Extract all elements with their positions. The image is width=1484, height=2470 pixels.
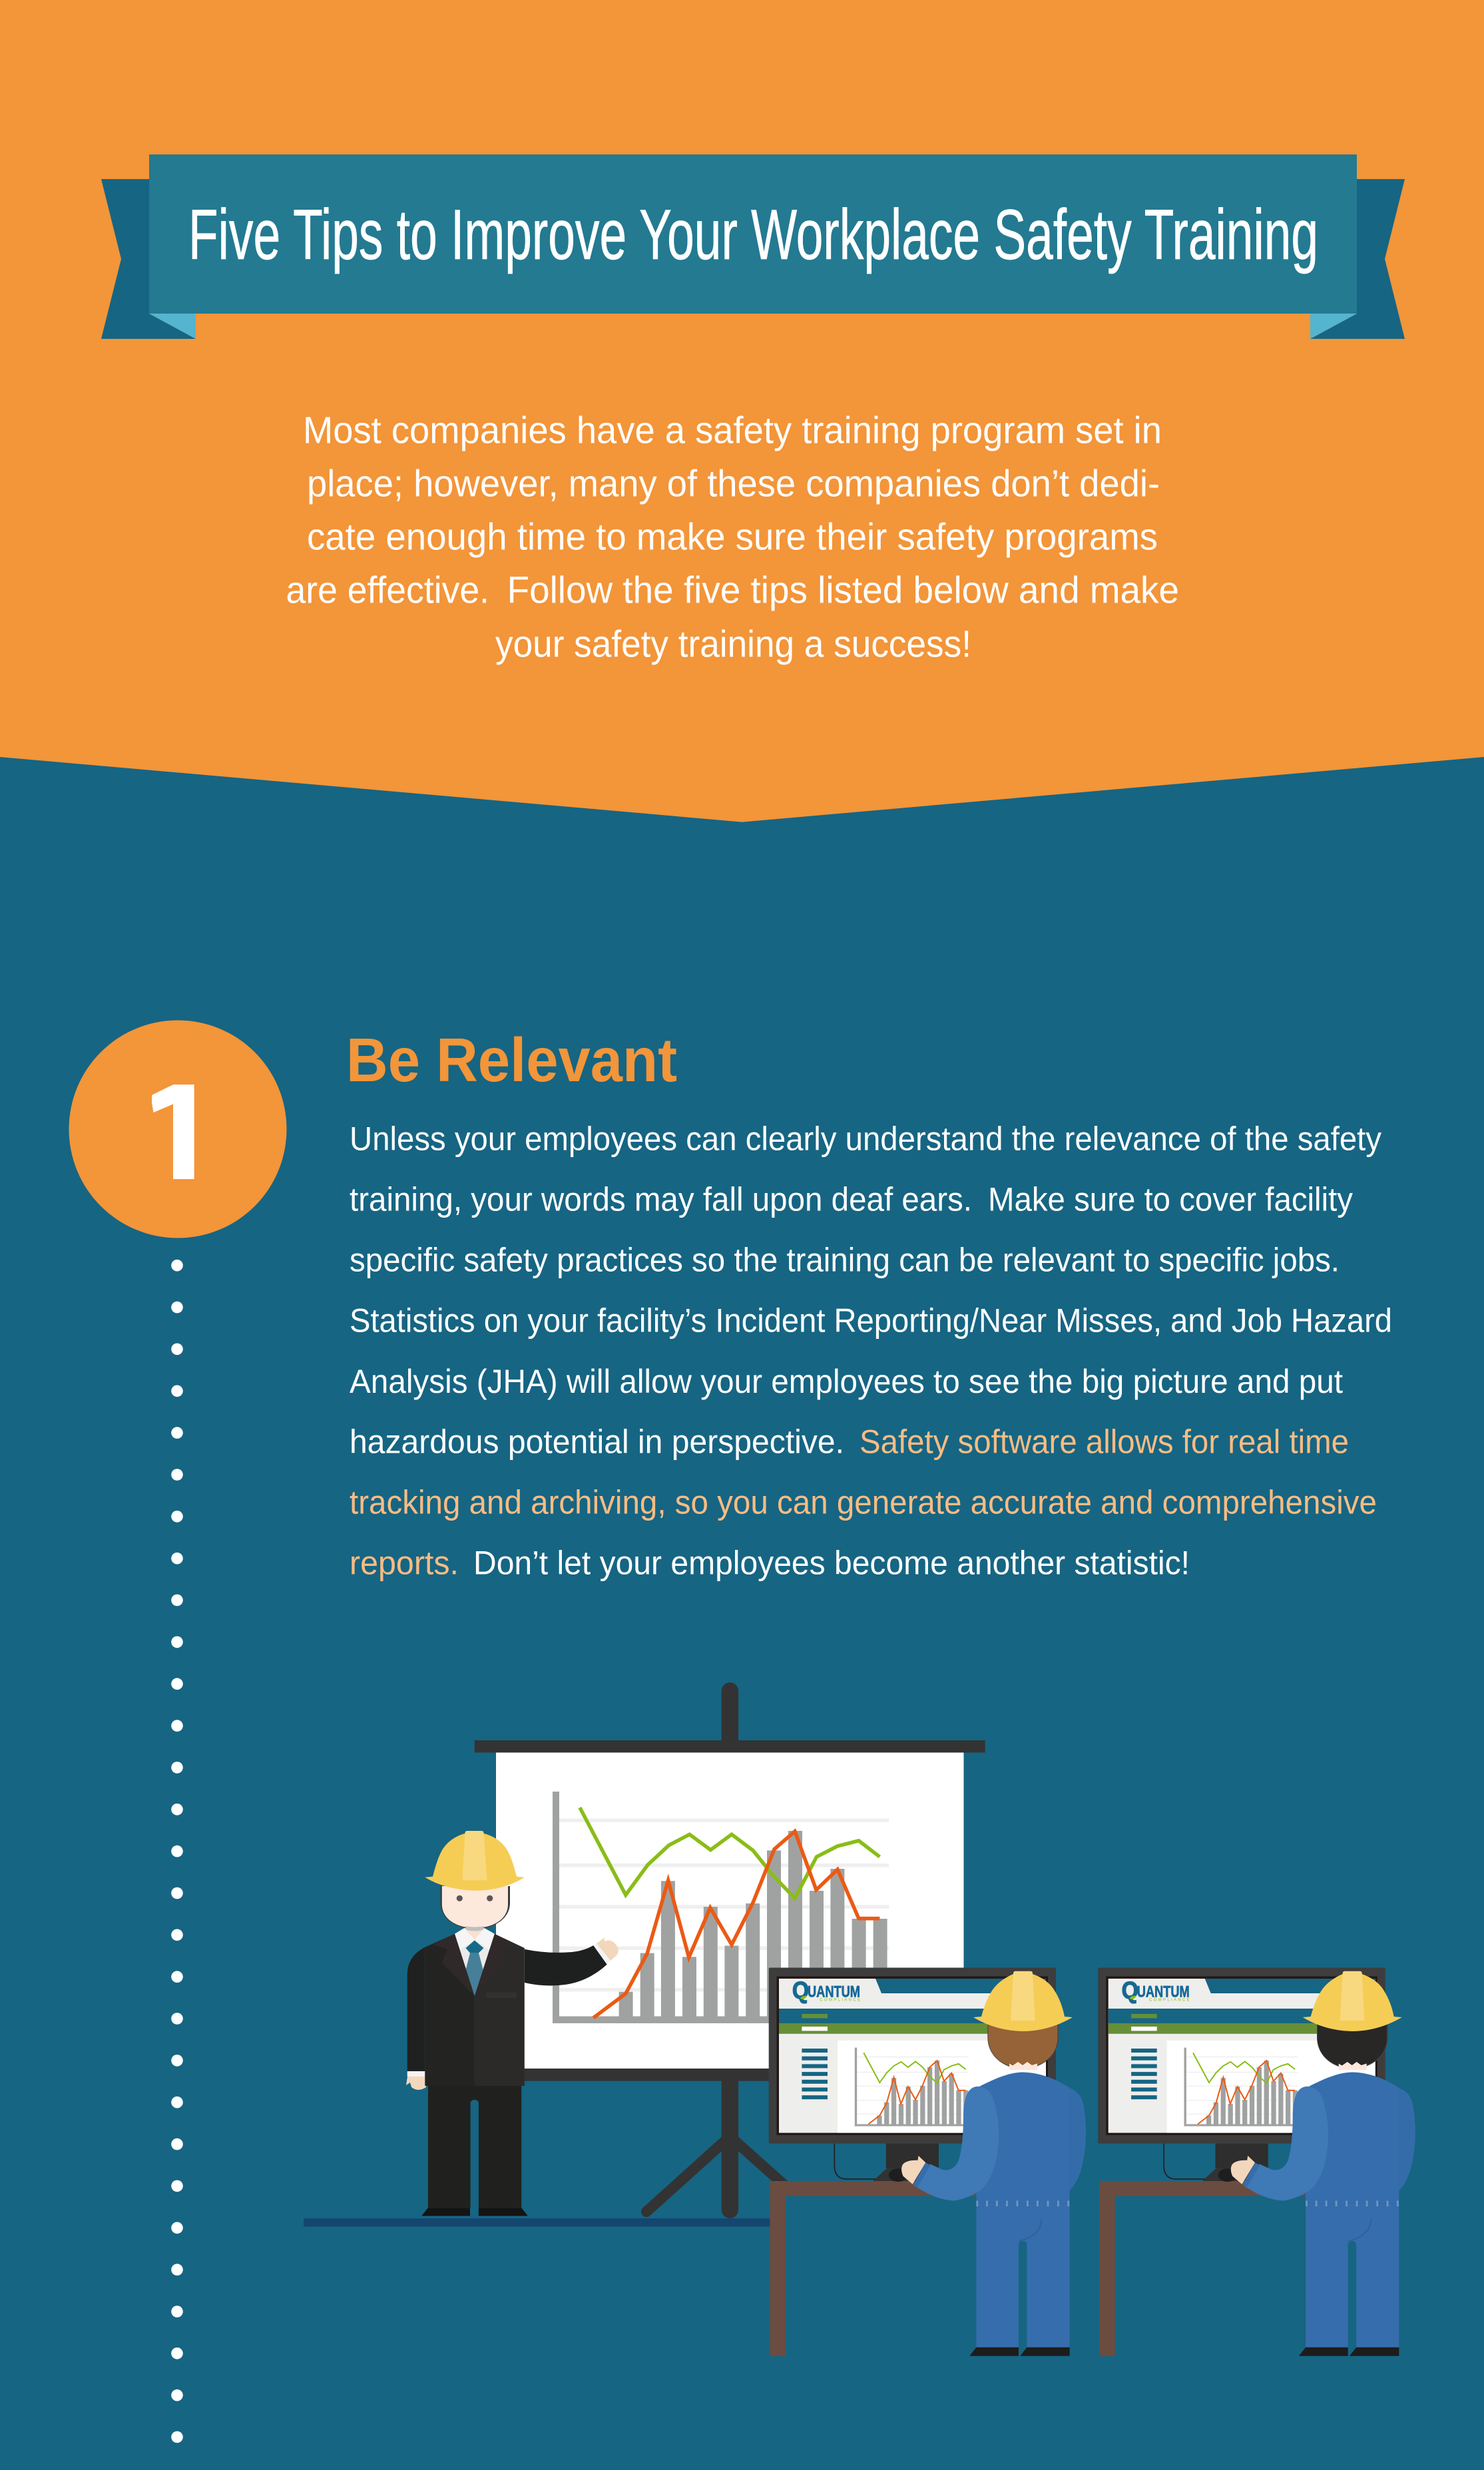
intro text block: cate enough time to make sure their safety programs	[307, 516, 1158, 559]
screen chart	[855, 2048, 969, 2126]
desk	[1099, 2181, 1306, 2356]
Quantum Compliance logo	[1122, 1977, 1190, 2004]
body text block: Make sure to cover facility	[988, 1181, 1353, 1218]
body text block: Analysis (JHA) will allow your employees to see the big picture and put	[350, 1363, 1343, 1400]
number badge 1	[69, 1020, 286, 1238]
number badge 1: 1	[144, 1031, 221, 1220]
monitor	[1098, 1968, 1385, 2144]
heading: Be Relevant: Be Relevant	[346, 1025, 677, 1095]
body text block	[350, 1120, 1392, 1582]
pants	[428, 2084, 521, 2208]
body text block: Safety software allows for real time	[860, 1423, 1349, 1461]
shirt and tie	[455, 1928, 495, 1996]
body text block: Unless your employees can clearly understand the relevance of the safety	[350, 1120, 1381, 1158]
projected chart	[553, 1792, 889, 2023]
desk	[770, 2181, 976, 2356]
Quantum Compliance logo: COMPLIANCE	[1149, 1998, 1190, 2002]
jacket	[425, 1934, 475, 2086]
floor line	[304, 2218, 783, 2226]
hanging arm	[407, 1947, 425, 2071]
screen chart	[1184, 2048, 1298, 2126]
intro text block: Follow the five tips listed below and make	[507, 569, 1179, 612]
Quantum Compliance logo: COMPLIANCE	[820, 1998, 860, 2002]
hard hat	[1303, 1974, 1402, 2031]
title ribbon banner	[101, 154, 1405, 339]
workstation 2	[1098, 1968, 1415, 2356]
body text block: specific safety practices so the training can be relevant to specific jobs.	[350, 1241, 1340, 1278]
hard hat	[425, 1834, 525, 1891]
intro text block: your safety training a success!	[495, 623, 971, 666]
monitor	[769, 1968, 1056, 2144]
intro text block: place; however, many of these companies don’t dedi-	[307, 463, 1160, 505]
intro text block	[286, 409, 1179, 666]
body text block: Don’t let your employees become another statistic!	[473, 1545, 1190, 1582]
worker with black hair	[1231, 1971, 1415, 2356]
pointing arm	[525, 1945, 607, 1985]
worker with brown hair	[901, 1971, 1086, 2356]
body text block: Statistics on your facility’s Incident Reporting/Near Misses, and Job Hazard	[350, 1302, 1392, 1339]
body text block: reports.	[350, 1545, 459, 1582]
Quantum Compliance logo: Q	[792, 1977, 809, 2004]
Quantum Compliance logo: UANTUM	[1137, 1983, 1190, 2001]
monitor stand and cable	[1164, 2144, 1268, 2182]
body text block: tracking and archiving, so you can generate accurate and comprehensive	[350, 1484, 1377, 1521]
Quantum Compliance logo	[792, 1977, 860, 2004]
intro text block: are effective.	[286, 569, 489, 612]
monitor stand and cable	[834, 2144, 939, 2182]
presenter in hard hat	[406, 1831, 618, 2216]
projector screen with chart	[475, 1682, 985, 2218]
intro text block: Most companies have a safety training program set in	[303, 409, 1162, 452]
body text block: hazardous potential in perspective.	[350, 1423, 844, 1461]
body text block: training, your words may fall upon deaf ears.	[350, 1181, 972, 1218]
dotted vertical connector	[171, 1260, 183, 2443]
Quantum Compliance logo: Q	[1122, 1977, 1138, 2004]
Quantum Compliance logo: UANTUM	[808, 1983, 860, 2001]
orange header panel	[0, 0, 1484, 822]
hard hat	[973, 1974, 1073, 2031]
head	[441, 1886, 510, 1929]
workstation 1	[769, 1968, 1086, 2356]
